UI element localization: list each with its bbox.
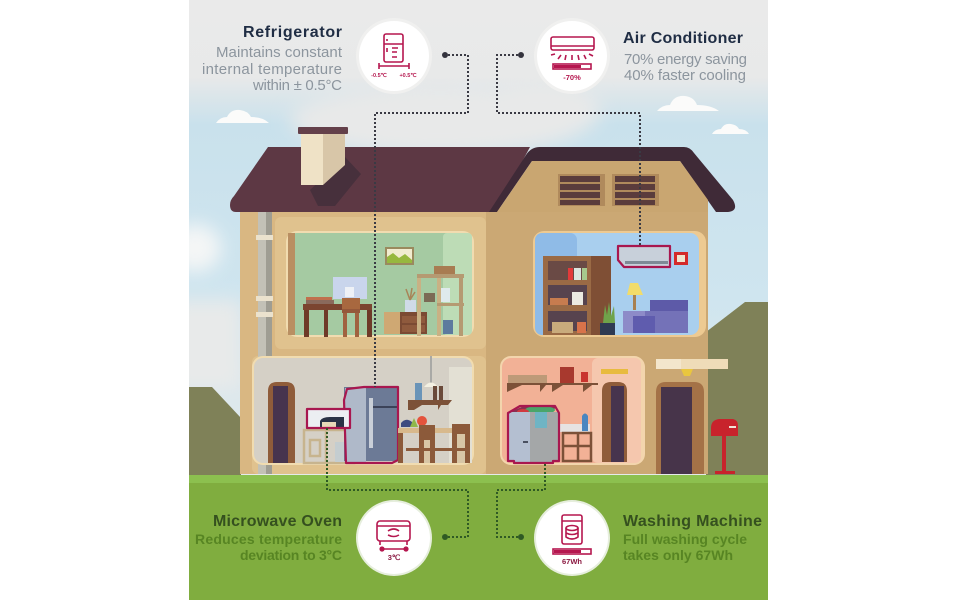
microwave appliance bbox=[307, 409, 350, 428]
microwave icon: 3℃ bbox=[388, 553, 401, 562]
air conditioner icon bbox=[534, 18, 610, 94]
refrigerator icon: -0.5℃ bbox=[371, 72, 388, 79]
house bbox=[230, 127, 738, 474]
gable wall bbox=[497, 161, 708, 212]
microwave heading: Microwave Oven bbox=[213, 513, 342, 530]
front door bbox=[656, 382, 704, 474]
clouds bbox=[216, 96, 749, 134]
upper wall panels bbox=[252, 217, 486, 474]
washing machine icon: 67Wh bbox=[562, 557, 582, 566]
wall shelf with boxes bbox=[507, 367, 598, 392]
connector: washing machine bbox=[497, 463, 545, 540]
refrigerator heading: Refrigerator bbox=[243, 24, 342, 41]
microwave description: Reduces temperature bbox=[195, 531, 342, 547]
microwave icon bbox=[356, 500, 432, 576]
air conditioner description: 40% faster cooling bbox=[624, 67, 746, 84]
sink and table bbox=[560, 414, 591, 461]
refrigerator icon bbox=[356, 18, 432, 94]
refrigerator callout bbox=[202, 18, 432, 94]
microwave callout bbox=[195, 500, 432, 576]
bookcase bbox=[543, 256, 611, 335]
air conditioner description: 70% energy saving bbox=[624, 51, 747, 68]
air conditioner unit bbox=[618, 246, 670, 267]
house wall bbox=[240, 208, 708, 474]
connector: air conditioner bbox=[497, 52, 640, 245]
right wall shade bbox=[486, 208, 708, 474]
porch canopy bbox=[656, 359, 728, 376]
microwave description: deviation to 3°C bbox=[240, 547, 342, 563]
washing machine icon bbox=[534, 500, 610, 576]
air conditioner heading: Air Conditioner bbox=[623, 30, 743, 47]
wall light bbox=[601, 369, 628, 374]
mailbox bbox=[711, 419, 738, 474]
lower left room bbox=[252, 356, 474, 465]
hills bbox=[189, 302, 768, 476]
cabinet with plant bbox=[384, 288, 427, 334]
interior door bbox=[268, 382, 295, 463]
refrigerator description: Maintains constant bbox=[216, 44, 343, 61]
shelving unit bbox=[417, 266, 464, 336]
microwave description bbox=[195, 531, 342, 563]
bottle under microwave bbox=[335, 442, 345, 462]
washing machine description: Full washing cycle bbox=[623, 531, 747, 547]
upper left room bbox=[286, 231, 474, 337]
wall clock bbox=[674, 252, 688, 265]
refrigerator appliance bbox=[344, 387, 398, 463]
dining table bbox=[398, 416, 470, 463]
refrigerator description: internal temperature bbox=[202, 61, 342, 78]
hanging lamp and shelf bbox=[408, 356, 452, 410]
infographic canvas bbox=[189, 0, 768, 600]
connector: microwave bbox=[327, 428, 468, 540]
sky background bbox=[169, 0, 768, 480]
lower right room bbox=[500, 356, 645, 465]
wall picture bbox=[385, 247, 414, 265]
washing machine description: takes only 67Wh bbox=[623, 547, 733, 563]
main roof bbox=[230, 147, 530, 212]
cupboard under microwave bbox=[304, 430, 354, 463]
lamp bbox=[627, 283, 643, 310]
drainpipe bbox=[256, 212, 273, 474]
chimney bbox=[298, 127, 361, 206]
washing machine callout bbox=[534, 500, 762, 576]
air conditioner description bbox=[624, 51, 747, 84]
connector: refrigerator bbox=[375, 52, 468, 387]
grass ground bbox=[189, 475, 768, 600]
vents bbox=[558, 174, 659, 206]
desk with computer bbox=[303, 277, 372, 337]
refrigerator description bbox=[202, 44, 343, 94]
washing machine description bbox=[623, 531, 747, 563]
gable roof outline bbox=[489, 147, 735, 212]
air conditioner callout bbox=[534, 18, 747, 94]
washing machine heading: Washing Machine bbox=[623, 513, 762, 530]
washing machine appliance bbox=[508, 406, 559, 463]
refrigerator icon: +0.5℃ bbox=[399, 72, 417, 79]
air conditioner icon: -70% bbox=[563, 73, 581, 82]
sofa bbox=[623, 300, 688, 333]
upper right room bbox=[533, 231, 706, 337]
plant bbox=[600, 302, 615, 335]
refrigerator description: within ± 0.5°C bbox=[252, 77, 342, 94]
interior door right bbox=[602, 382, 627, 462]
